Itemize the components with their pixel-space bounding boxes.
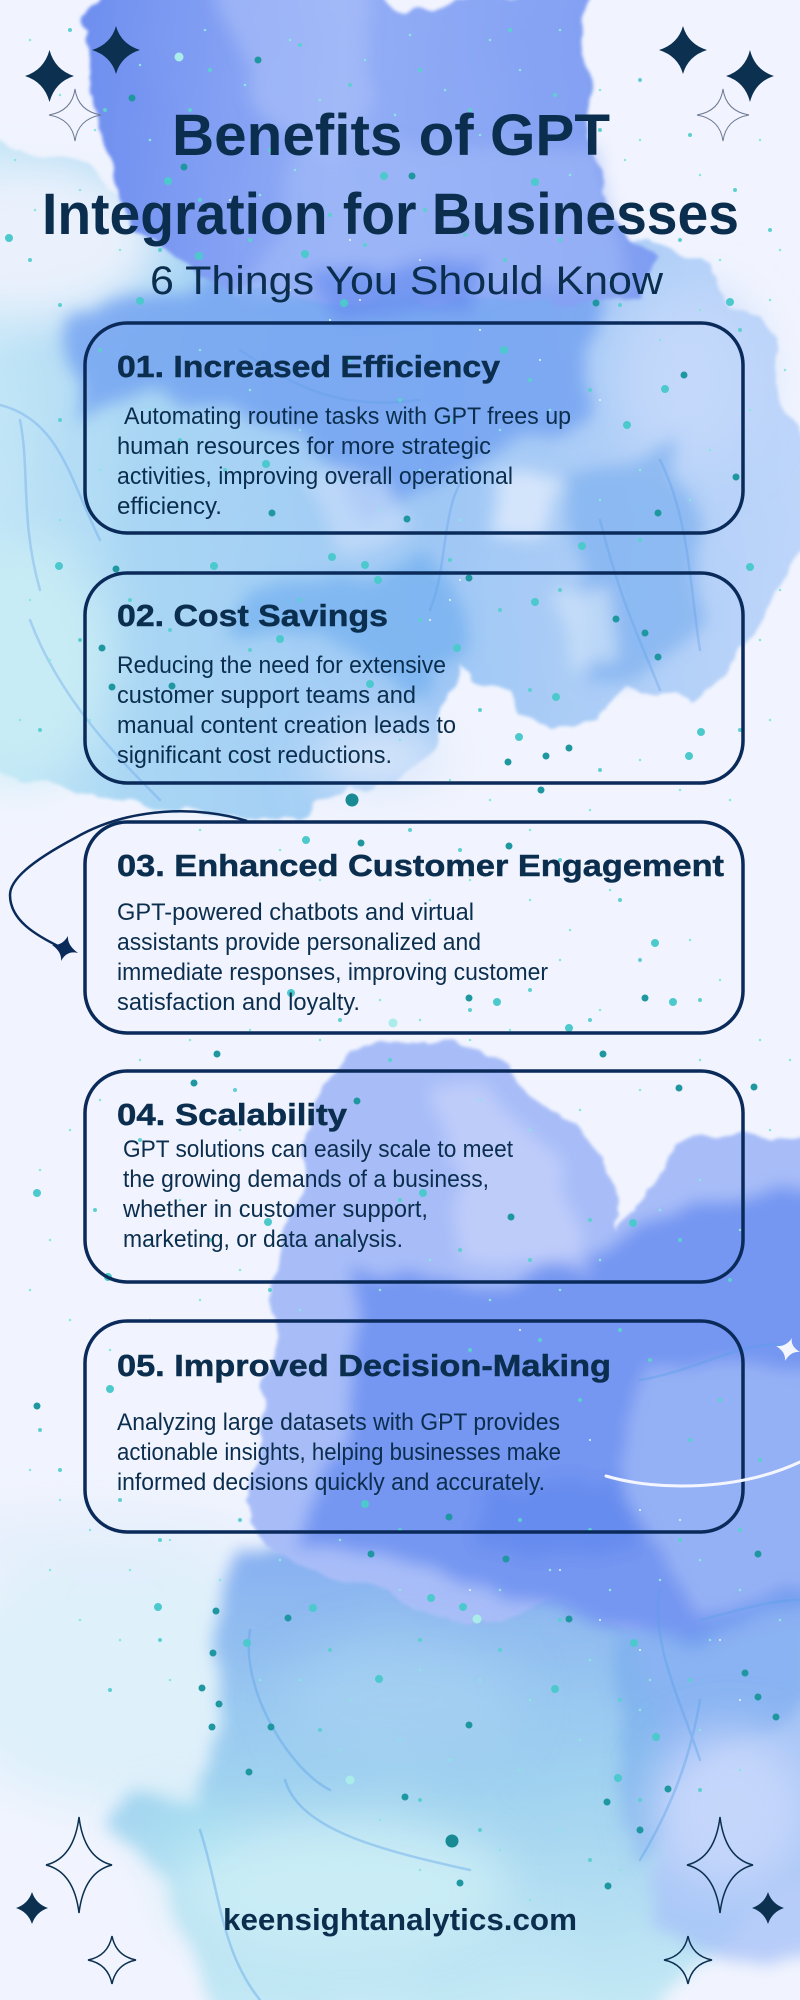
text block: scalability: whether in customer support, [122, 1196, 428, 1223]
star: outline bottom left large [46, 1817, 112, 1913]
star: outline top right [697, 89, 749, 141]
star: filled top right outer [726, 50, 774, 102]
text block: enhanced customer engagement: satisfaction and loyalty. [117, 989, 360, 1016]
star: filled bottom left [16, 1892, 48, 1924]
star: filled top left inner [92, 26, 140, 74]
text block: scalability: GPT solutions can easily scale to meet [123, 1136, 513, 1163]
text block: increased efficiency: Automating routine tasks with GPT frees up [124, 403, 571, 430]
star: outline top left [49, 89, 101, 141]
text block: cost savings: significant cost reductions. [117, 742, 392, 769]
text block: cost savings [117, 652, 456, 769]
heading: enhanced customer engagement: 03. Enhanced Customer Engagement [117, 848, 724, 883]
text block: enhanced customer engagement: immediate responses, improving customer [117, 959, 548, 986]
panel: enhanced customer engagement [85, 822, 743, 1033]
text block: scalability: marketing, or data analysis. [123, 1226, 403, 1253]
text block: increased efficiency: human resources for more strategic [117, 433, 491, 460]
text block: enhanced customer engagement [117, 899, 548, 1016]
text block: increased efficiency: activities, improving overall operational [117, 463, 513, 490]
text block: cost savings: Reducing the need for extensive [117, 652, 446, 679]
icon: white star [776, 1338, 800, 1361]
text block: improved decision-making: actionable insights, helping businesses make [117, 1439, 561, 1466]
arrow: curved connector to card 03 [10, 811, 247, 961]
star: filled top left outer [25, 50, 74, 102]
star: filled bottom right [752, 1892, 784, 1924]
icon: arrow star tip [52, 936, 78, 961]
heading: cost savings: 02. Cost Savings [117, 598, 388, 633]
panel: cost savings [85, 573, 743, 783]
arrow: white curve [606, 1462, 800, 1486]
heading: increased efficiency: 01. Increased Efficiency [117, 349, 501, 384]
text block: enhanced customer engagement: assistants provide personalized and [117, 929, 481, 956]
text block: cost savings: manual content creation leads to [117, 712, 456, 739]
title: Benefits of GPT [172, 103, 610, 168]
text block: cost savings: customer support teams and [117, 682, 416, 709]
text block: improved decision-making: Analyzing large datasets with GPT provides [117, 1409, 560, 1436]
panel: improved decision-making [85, 1321, 743, 1532]
subtitle: 6 Things You Should Know [150, 259, 663, 303]
heading: improved decision-making: 05. Improved Decision-Making [117, 1348, 611, 1383]
title: Integration for Businesses [42, 182, 739, 247]
panel: scalability [85, 1071, 743, 1282]
text block: scalability [122, 1136, 513, 1253]
text block: scalability: the growing demands of a business, [123, 1166, 489, 1193]
text block: increased efficiency [117, 403, 571, 520]
star: outline bottom left small [88, 1936, 136, 1984]
star: outline bottom right large [687, 1817, 753, 1913]
text block: improved decision-making [117, 1409, 561, 1496]
panel: increased efficiency [85, 323, 743, 533]
heading: scalability: 04. Scalability [117, 1097, 348, 1132]
title [42, 103, 739, 247]
footer: website: keensightanalytics.com [223, 1902, 577, 1937]
text block: improved decision-making: informed decisions quickly and accurately. [117, 1469, 545, 1496]
text block: increased efficiency: efficiency. [117, 493, 222, 520]
star: filled top right inner [659, 26, 707, 74]
star: outline bottom right small [664, 1936, 712, 1984]
text block: enhanced customer engagement: GPT-powered chatbots and virtual [117, 899, 474, 926]
